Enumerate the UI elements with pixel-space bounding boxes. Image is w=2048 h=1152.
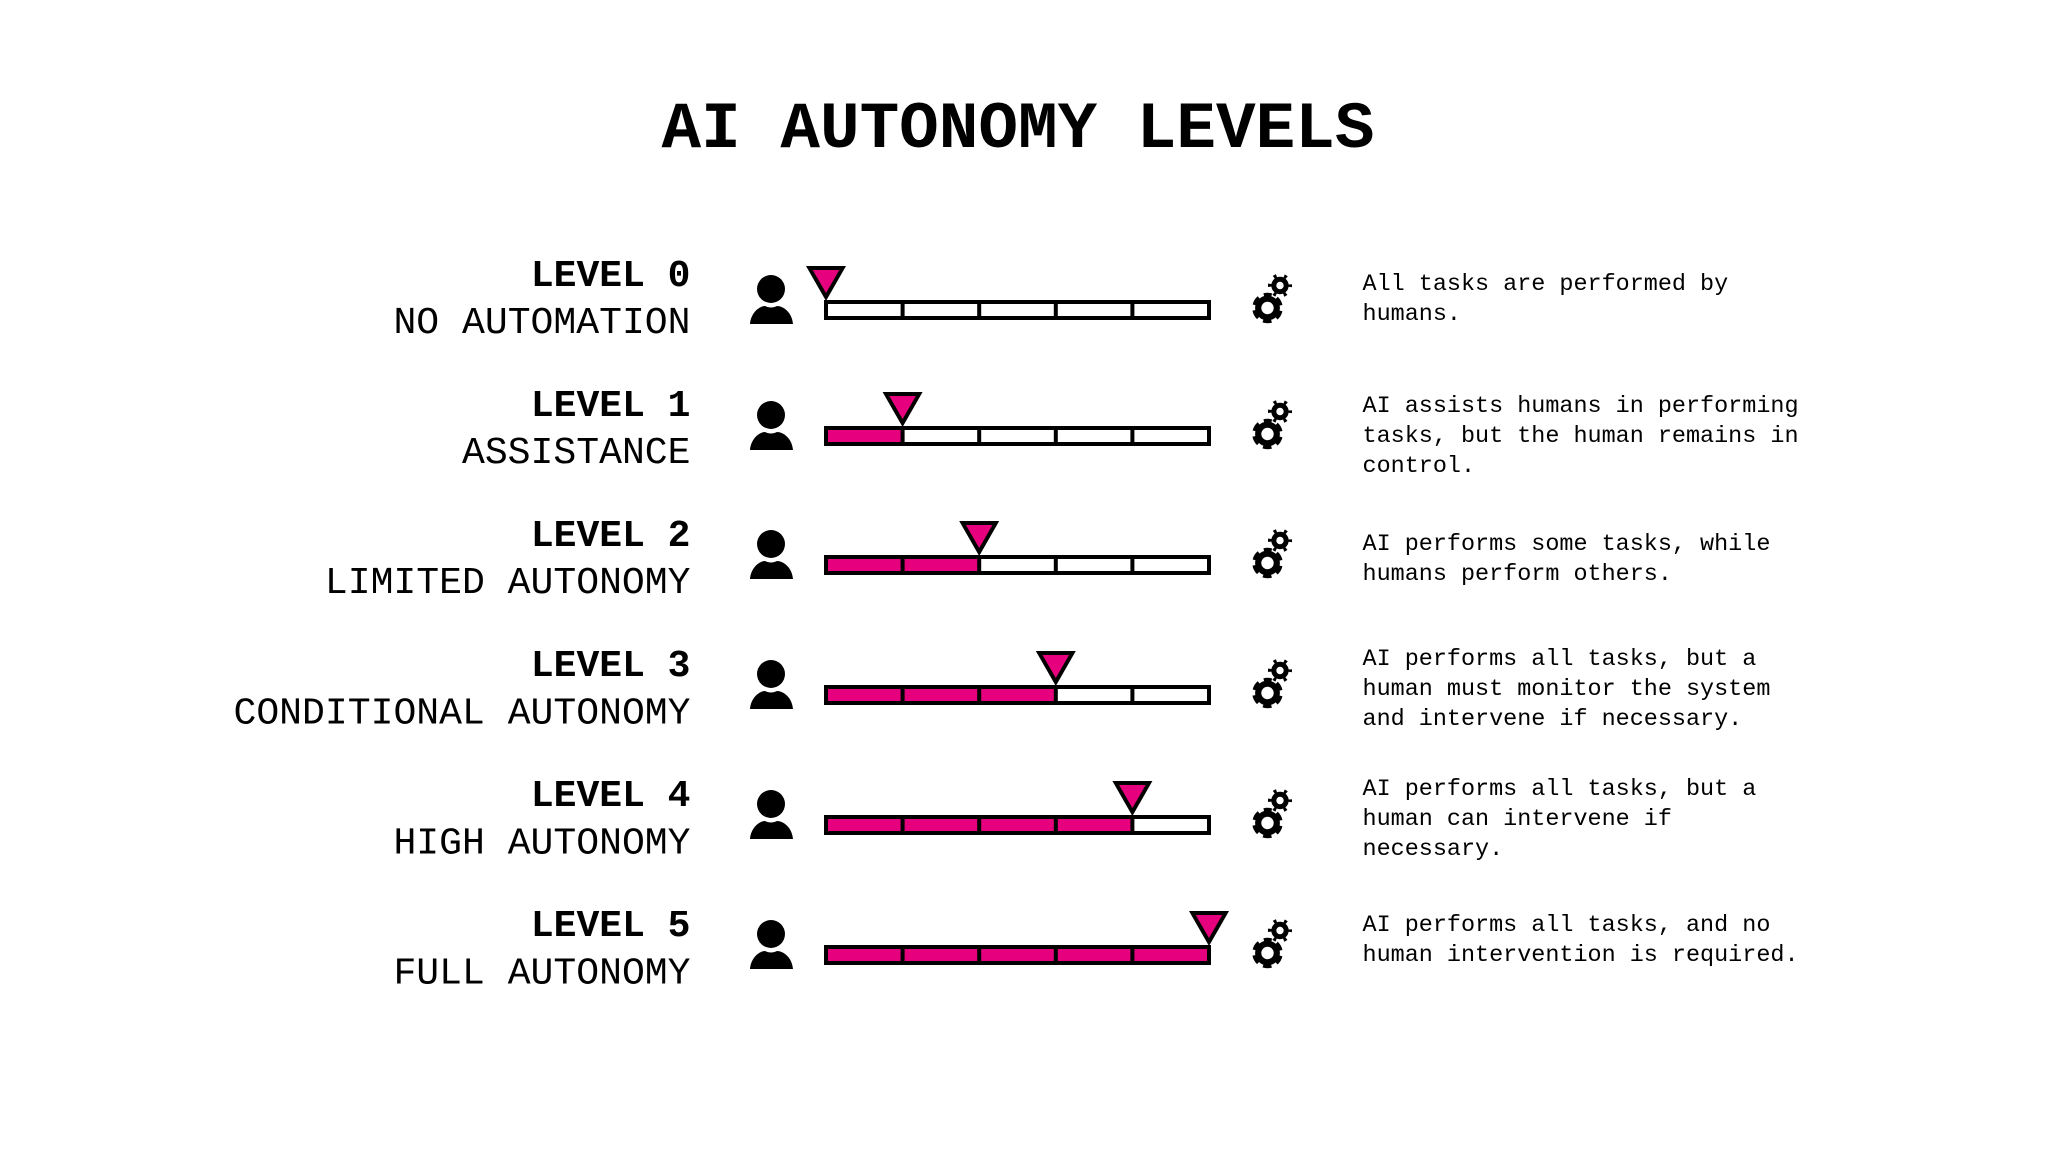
- progress bar: level 3: [826, 687, 1209, 703]
- row: level 2: [325, 515, 1770, 605]
- description: level 4: AI performs all tasks, but a: [1362, 776, 1756, 803]
- description: level 5: AI performs all tasks, and no: [1362, 912, 1770, 939]
- progress bar: level 5: [826, 947, 1209, 963]
- description: level 2: AI performs some tasks, while: [1362, 531, 1770, 558]
- label: level 4: HIGH AUTONOMY: [393, 822, 691, 866]
- label: level 3: LEVEL 3: [531, 645, 690, 688]
- description: level 2: humans perform others.: [1362, 561, 1672, 588]
- label: level 2: [325, 515, 691, 605]
- progress bar: level 0: [826, 302, 1209, 318]
- marker: level 4: [1112, 781, 1152, 816]
- label: level 2: LIMITED AUTONOMY: [325, 562, 691, 605]
- icon: gears: [1254, 790, 1290, 836]
- progress bar: level 1: [826, 428, 1209, 444]
- description: level 4: human can intervene if: [1362, 806, 1672, 833]
- description: level 0: All tasks are performed by: [1362, 271, 1728, 298]
- label: level 4: LEVEL 4: [531, 775, 690, 818]
- row: level 0: [393, 255, 1728, 345]
- label: level 5: [393, 905, 691, 996]
- label: level 3: CONDITIONAL AUTONOMY: [233, 692, 691, 736]
- description: level 0: humans.: [1362, 301, 1461, 328]
- icon: gears: [1254, 276, 1290, 321]
- row: level 1: [462, 385, 1799, 480]
- marker: level 5: [1189, 911, 1229, 946]
- description: level 3: AI performs all tasks, but a: [1362, 646, 1756, 673]
- description: level 3: human must monitor the system: [1362, 676, 1770, 703]
- row: level 4: [393, 775, 1756, 866]
- marker: level 2: [959, 521, 999, 556]
- label: level 2: LEVEL 2: [531, 515, 690, 558]
- marker: level 0: [806, 266, 846, 301]
- icon: human: [750, 660, 793, 709]
- marker: level 1: [883, 392, 923, 427]
- description: level 4: necessary.: [1362, 836, 1503, 863]
- description: level 1: tasks, but the human remains in: [1362, 423, 1799, 450]
- label: level 1: ASSISTANCE: [462, 432, 690, 475]
- label: level 0: NO AUTOMATION: [393, 302, 690, 345]
- label: level 0: LEVEL 0: [531, 255, 690, 298]
- icon: human: [750, 920, 793, 969]
- row: level 5: [393, 905, 1799, 996]
- icon: human: [750, 530, 793, 579]
- progress bar: level 4: [826, 817, 1209, 833]
- description: level 5: human intervention is required.: [1362, 942, 1799, 969]
- label: level 1: LEVEL 1: [531, 385, 690, 428]
- row: level 3: [233, 645, 1770, 736]
- icon: gears: [1254, 660, 1290, 706]
- label: level 5: FULL AUTONOMY: [393, 952, 691, 996]
- label: level 0: [393, 255, 690, 345]
- icon: human: [750, 790, 793, 839]
- progress bar: level 2: [826, 557, 1209, 573]
- label: level 4: [393, 775, 691, 866]
- icon: gears: [1254, 920, 1290, 966]
- marker: level 3: [1036, 651, 1076, 686]
- description: level 1: control.: [1362, 453, 1475, 480]
- label: level 5: LEVEL 5: [531, 905, 690, 948]
- icon: human: [750, 275, 793, 324]
- description: level 1: AI assists humans in performing: [1362, 393, 1799, 420]
- icon: gears: [1254, 402, 1290, 447]
- icon: gears: [1254, 530, 1290, 576]
- title: AI AUTONOMY LEVELS: [662, 92, 1374, 167]
- icon: human: [750, 401, 793, 450]
- label: level 3: [233, 645, 691, 736]
- description: level 3: and intervene if necessary.: [1362, 706, 1742, 733]
- label: level 1: [462, 385, 690, 475]
